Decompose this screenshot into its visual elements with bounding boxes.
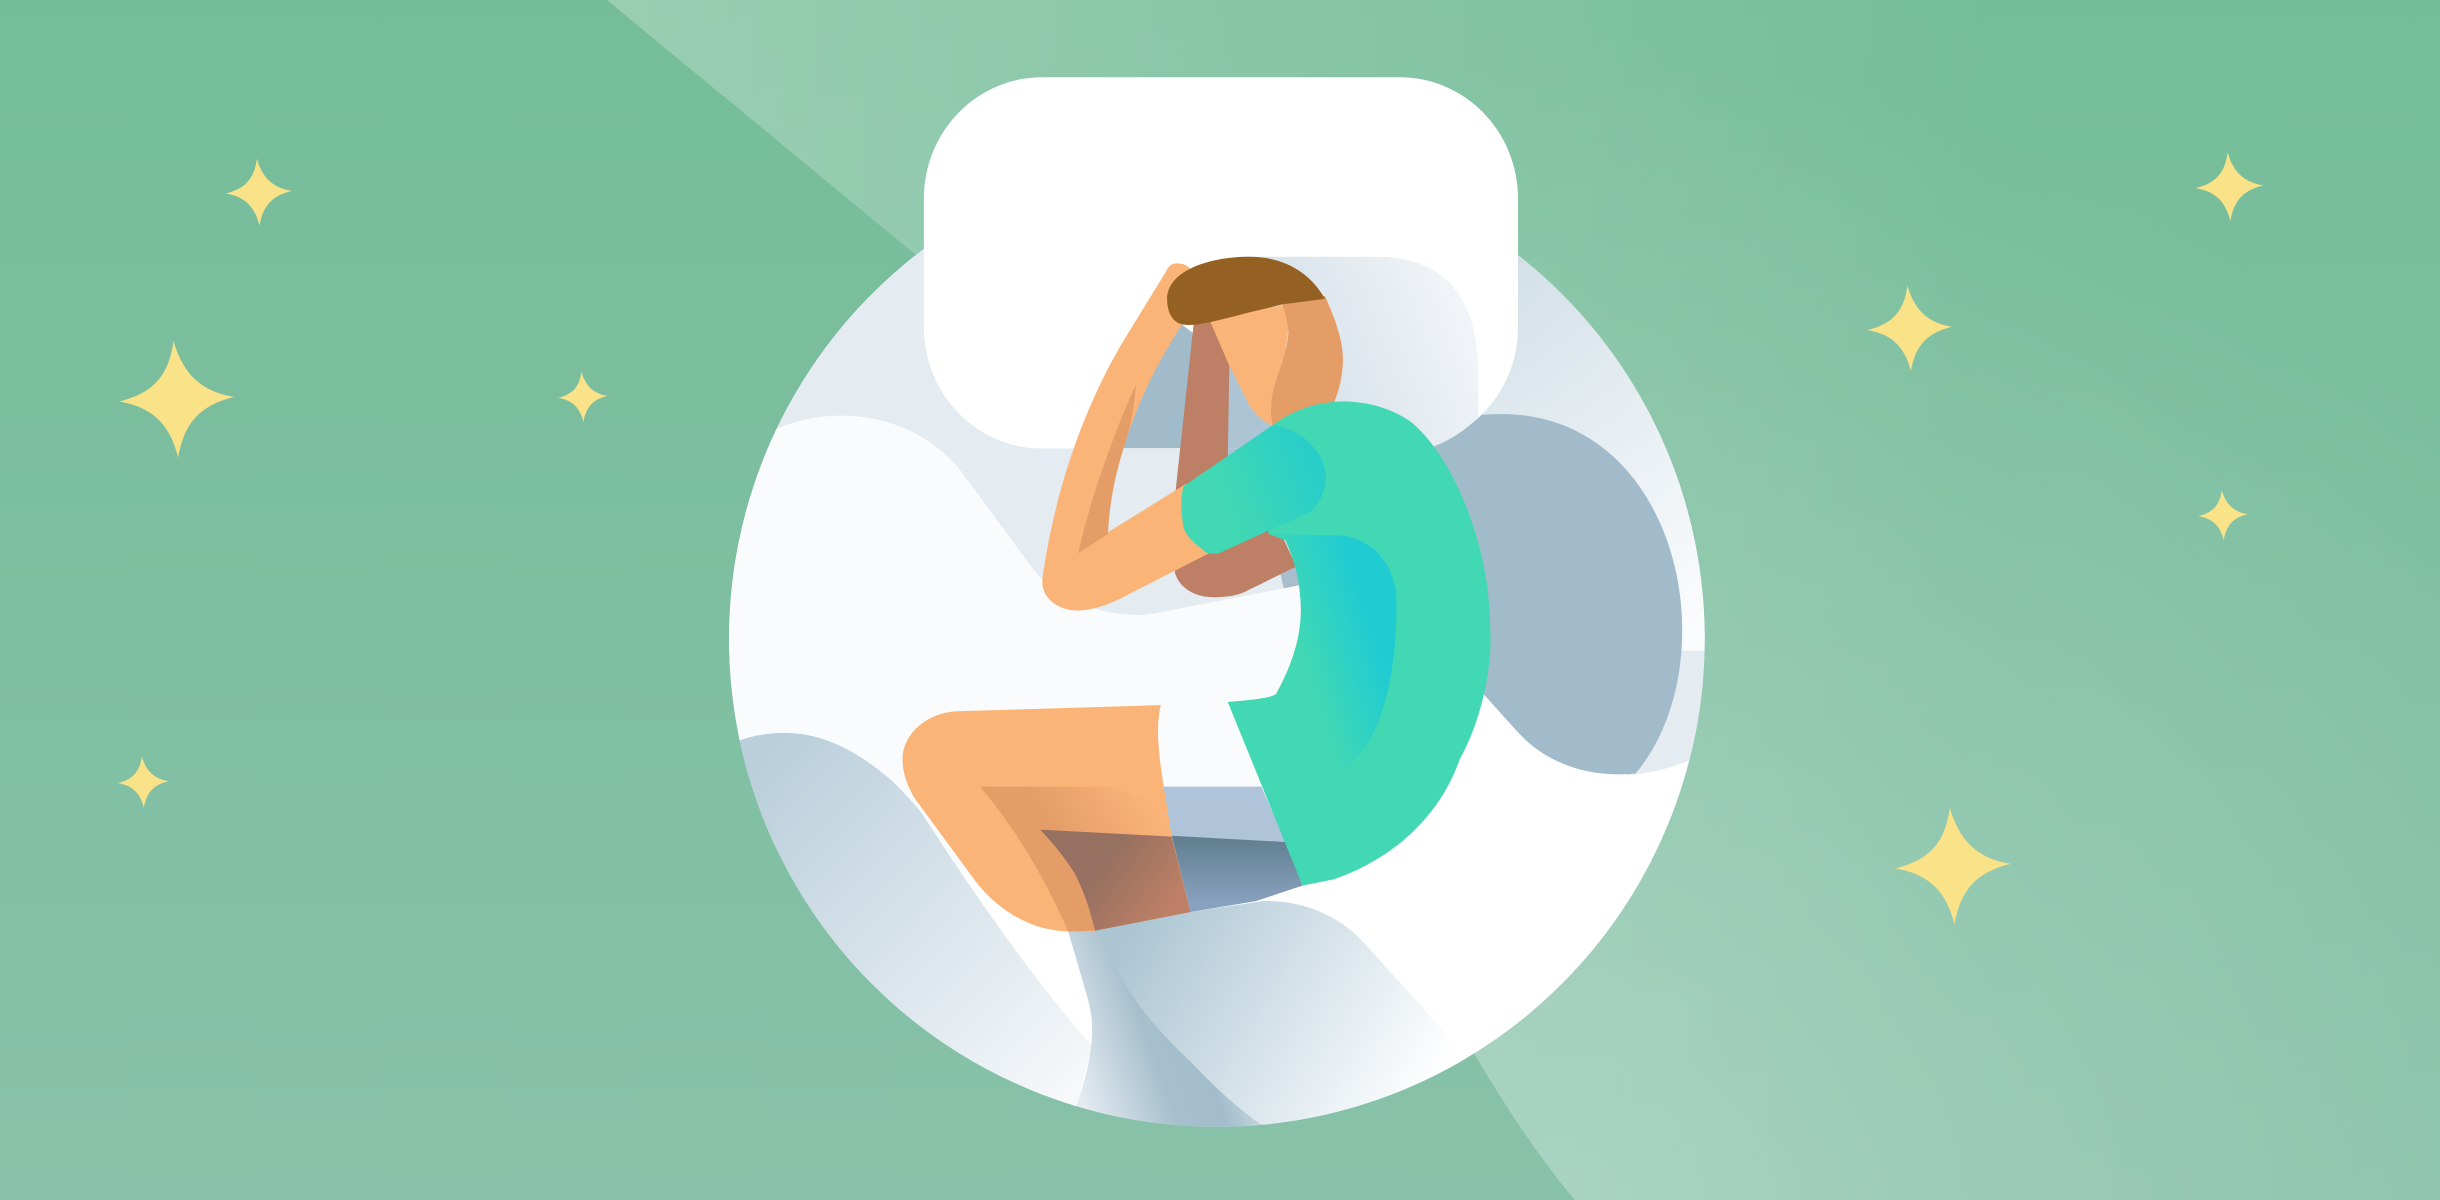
person [903, 257, 1491, 932]
shirt chest shade [1269, 534, 1396, 781]
back forearm [1175, 529, 1296, 597]
neck and face [1209, 304, 1292, 426]
thigh [903, 705, 1190, 932]
hair [1167, 257, 1325, 325]
star large lower right [1895, 808, 2011, 925]
bed circle [729, 249, 1705, 1127]
light beam [607, 0, 2440, 1200]
small fold behind elbow [1280, 567, 1299, 588]
pillow [924, 77, 1518, 449]
arm inner shade [1078, 384, 1136, 553]
star top left [226, 159, 292, 226]
circle base [729, 250, 1705, 1127]
shorts light [1159, 787, 1286, 842]
wall upper left [729, 249, 1292, 650]
shorts dark [1172, 836, 1302, 912]
foot [1068, 931, 1262, 1144]
star lower left [118, 756, 168, 808]
right lower strip [1626, 651, 1712, 775]
star upper right [1867, 286, 1952, 371]
back arm [1175, 319, 1229, 492]
star top right [2196, 153, 2263, 221]
wall gap under pillow [1089, 448, 1299, 560]
pillow shadow [1245, 257, 1478, 448]
white mattress [729, 416, 1301, 850]
face shade [1271, 296, 1343, 425]
shirt torso [1228, 402, 1491, 886]
shin [1094, 901, 1466, 1127]
star small right [2198, 490, 2248, 540]
shirt sleeve [1181, 425, 1326, 554]
star small mid left [558, 372, 608, 422]
pillow hollow behind arm [1113, 319, 1284, 448]
thigh shade [980, 787, 1172, 932]
thigh dark [1040, 830, 1190, 931]
star large left [119, 341, 234, 458]
blanket lower left [740, 732, 1091, 1106]
front arm [1042, 263, 1209, 611]
wall upper right [1494, 255, 1705, 650]
blanket fold right [1434, 414, 1682, 774]
